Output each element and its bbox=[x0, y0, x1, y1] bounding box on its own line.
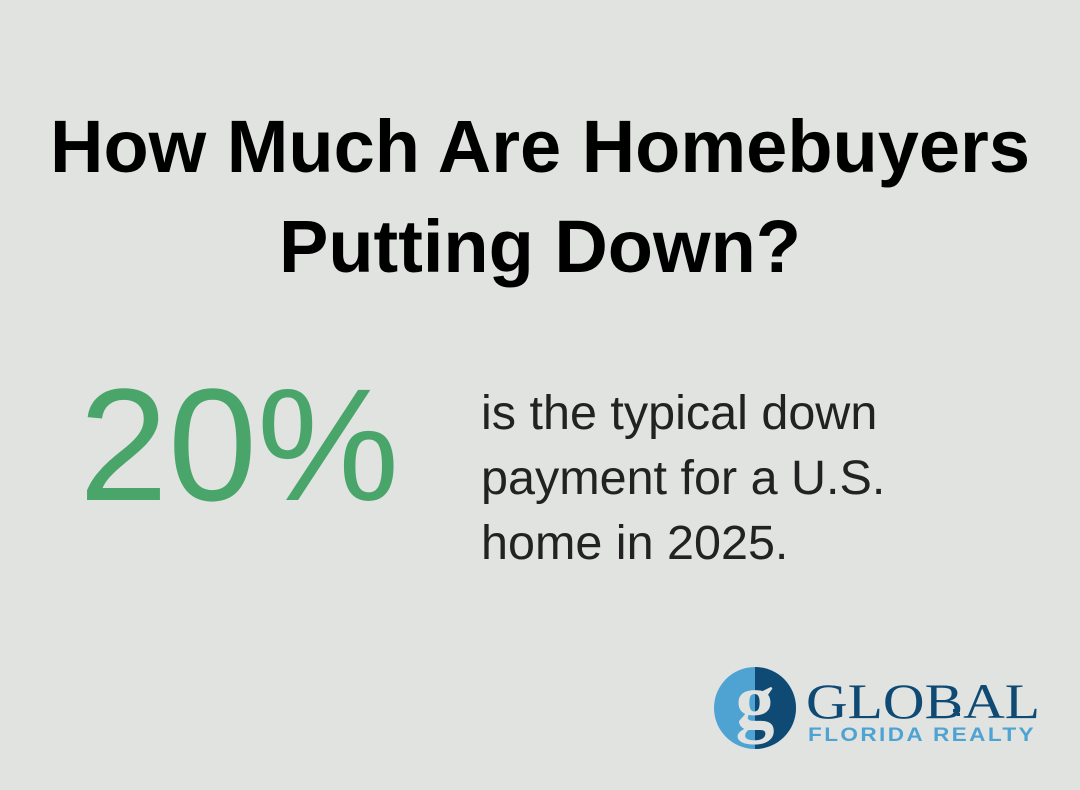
big stat: 20% bbox=[79, 355, 399, 534]
description text bbox=[481, 386, 885, 570]
title bbox=[50, 105, 1030, 288]
wordmark FLORIDA REALTY: FLORIDA REALTY bbox=[808, 725, 1036, 746]
icon: window in A bbox=[953, 709, 960, 716]
description text: home in 2025. bbox=[481, 516, 788, 570]
description text: is the typical down bbox=[481, 386, 877, 440]
title: Putting Down? bbox=[279, 205, 801, 288]
icon: g circle bbox=[714, 657, 796, 749]
wordmark GLOBAL: GLOBAL bbox=[806, 673, 1040, 729]
title: How Much Are Homebuyers bbox=[50, 105, 1030, 188]
logo bbox=[714, 665, 1040, 749]
description text: payment for a U.S. bbox=[481, 451, 885, 505]
